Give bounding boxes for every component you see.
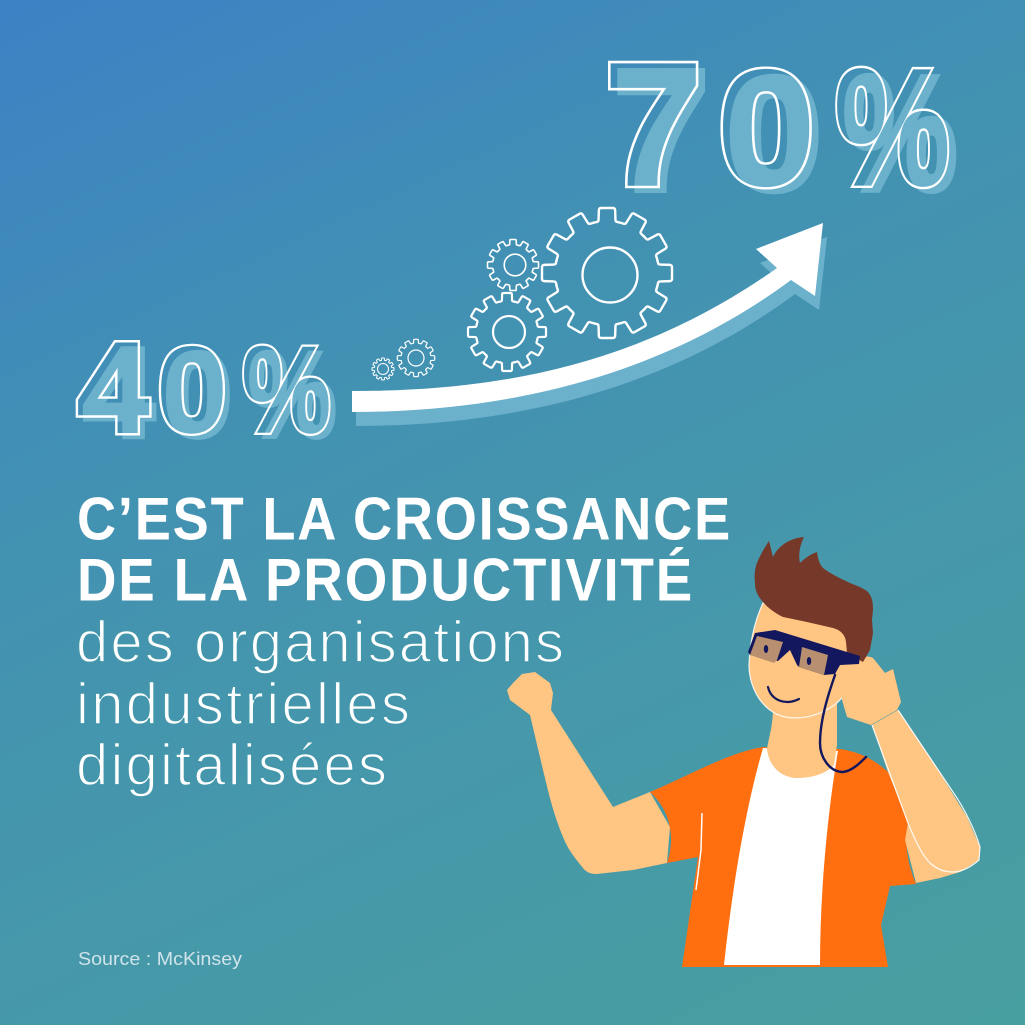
jacket [650,747,916,967]
big number: 70% [608,60,956,194]
eye right [807,657,811,665]
illustration: man with smart glasses [507,537,980,967]
heading [77,486,732,614]
hair [755,537,873,662]
icon: tiny gear [372,358,394,380]
forearm [872,710,980,883]
eye left [764,645,768,653]
text block: subtitle: industrielles [76,672,410,737]
big number: 40% [76,340,336,440]
big number: 70%: 0 [727,45,822,223]
smart glasses [748,630,860,675]
neck [767,695,837,778]
raised arm [507,672,670,874]
big number: 70%: % [844,43,957,223]
source: Source : McKinsey [78,948,243,969]
face [749,603,870,718]
smile [768,687,799,702]
text block: subtitle [76,610,564,798]
lens left [750,636,783,663]
icon: large gear [542,208,672,338]
big number: 40%: 0 [164,329,232,462]
heading: DE LA PRODUCTIVITÉ [77,546,694,614]
text block: subtitle: digitalisées [76,733,387,798]
heading: C’EST LA CROISSANCE [77,486,732,552]
text block: subtitle: des organisations [76,610,564,675]
big number: 40%: % [249,329,336,462]
arrow: growth curve [352,223,827,426]
cord [820,675,866,772]
jacket fold line [696,813,702,890]
icon: medium gear lower [468,293,546,371]
arm outline [872,710,980,872]
hand at ear [840,656,901,725]
t-shirt [724,748,838,965]
lens right [799,647,828,675]
big number: 40%: 4 [84,322,154,463]
icon: medium gear upper [488,240,538,290]
icon: small gear [397,339,435,377]
big number: 70%: 7 [614,36,709,226]
